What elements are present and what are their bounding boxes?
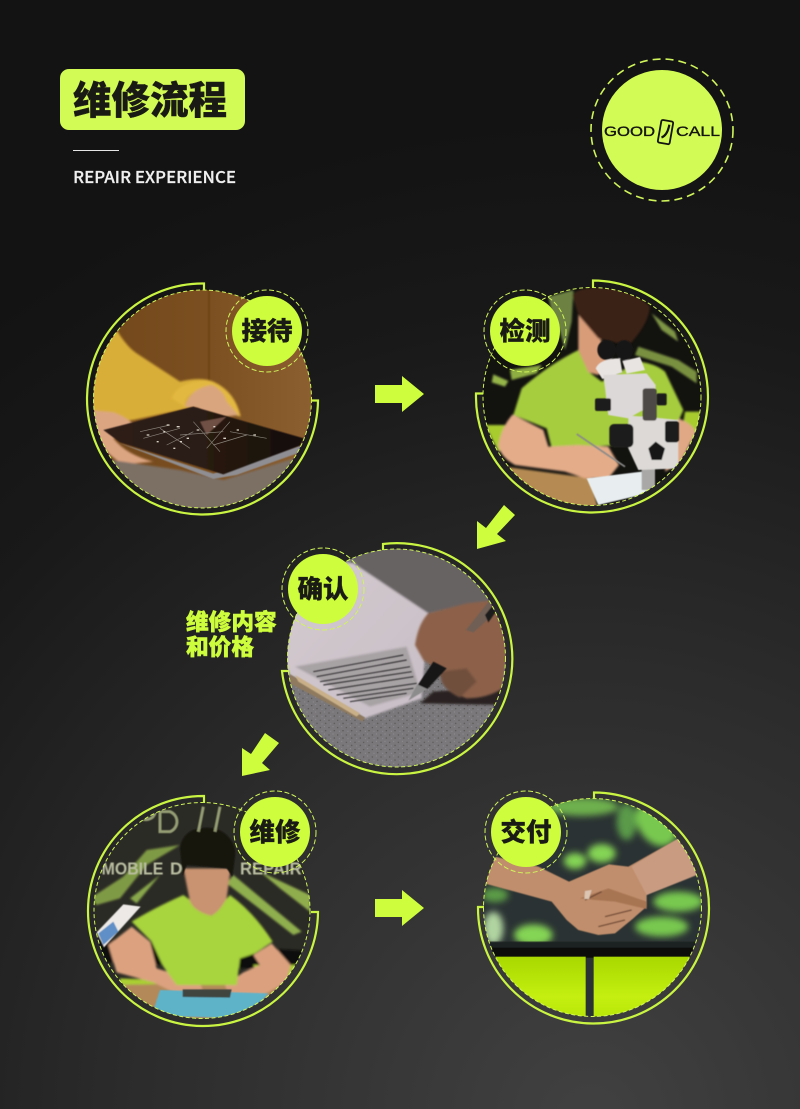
step 1: reception bbox=[86, 282, 320, 516]
photo dashed ring bbox=[484, 798, 702, 1016]
side caption: 和价格 bbox=[186, 629, 254, 662]
step badge bbox=[234, 791, 316, 873]
photo: signing a document bbox=[288, 549, 506, 767]
photo: cracked tablet bbox=[94, 290, 312, 508]
side caption: 维修内容 bbox=[186, 604, 277, 637]
step badge: 维修 bbox=[249, 812, 301, 849]
logo text left: GOOD bbox=[604, 123, 655, 139]
title: 维修流程 bbox=[73, 70, 227, 126]
step badge bbox=[226, 290, 308, 372]
logo text right: CALL bbox=[676, 123, 720, 139]
photo dashed ring bbox=[94, 802, 310, 1018]
step 2: inspection bbox=[474, 279, 710, 514]
photo: technician at microscope bbox=[483, 288, 701, 506]
step badge: 检测 bbox=[499, 311, 551, 348]
outer arc bbox=[478, 792, 709, 1023]
outer arc bbox=[87, 283, 318, 514]
outer arc bbox=[476, 280, 708, 512]
step badge bbox=[484, 290, 566, 372]
subtitle: REPAIR EXPERIENCE bbox=[73, 164, 236, 188]
step 5: delivery bbox=[476, 790, 710, 1025]
icon: phone bbox=[658, 120, 673, 144]
step badge: 确认 bbox=[297, 569, 349, 606]
photo: handshake bbox=[484, 798, 702, 1016]
photo: technician repairing: MOBILE bbox=[102, 858, 163, 878]
title pill bbox=[60, 69, 245, 130]
arrow: step 2 to step 3 bbox=[477, 505, 515, 549]
title block bbox=[60, 69, 245, 188]
photo: technician repairing bbox=[94, 806, 310, 1018]
side caption bbox=[186, 604, 277, 662]
photo dashed ring bbox=[94, 290, 312, 508]
photo: technician repairing: REPAIR bbox=[240, 858, 302, 878]
arrow: step 3 to step 4 bbox=[242, 733, 279, 776]
step badge bbox=[485, 791, 567, 873]
outer arc bbox=[88, 796, 318, 1026]
step 3: confirmation bbox=[186, 535, 517, 785]
photo: technician repairing: D bbox=[170, 858, 183, 878]
step 4: repair bbox=[86, 790, 320, 1028]
arrow: step 4 to step 5 bbox=[375, 890, 424, 926]
outer arc bbox=[282, 543, 512, 774]
step badge: 交付 bbox=[500, 812, 552, 849]
step badge: 接待 bbox=[241, 311, 293, 348]
photo dashed ring bbox=[483, 288, 701, 506]
photo dashed ring bbox=[288, 549, 506, 767]
arrow: step 1 to step 2 bbox=[375, 376, 424, 412]
logo badge bbox=[591, 59, 733, 201]
step badge bbox=[282, 548, 364, 630]
